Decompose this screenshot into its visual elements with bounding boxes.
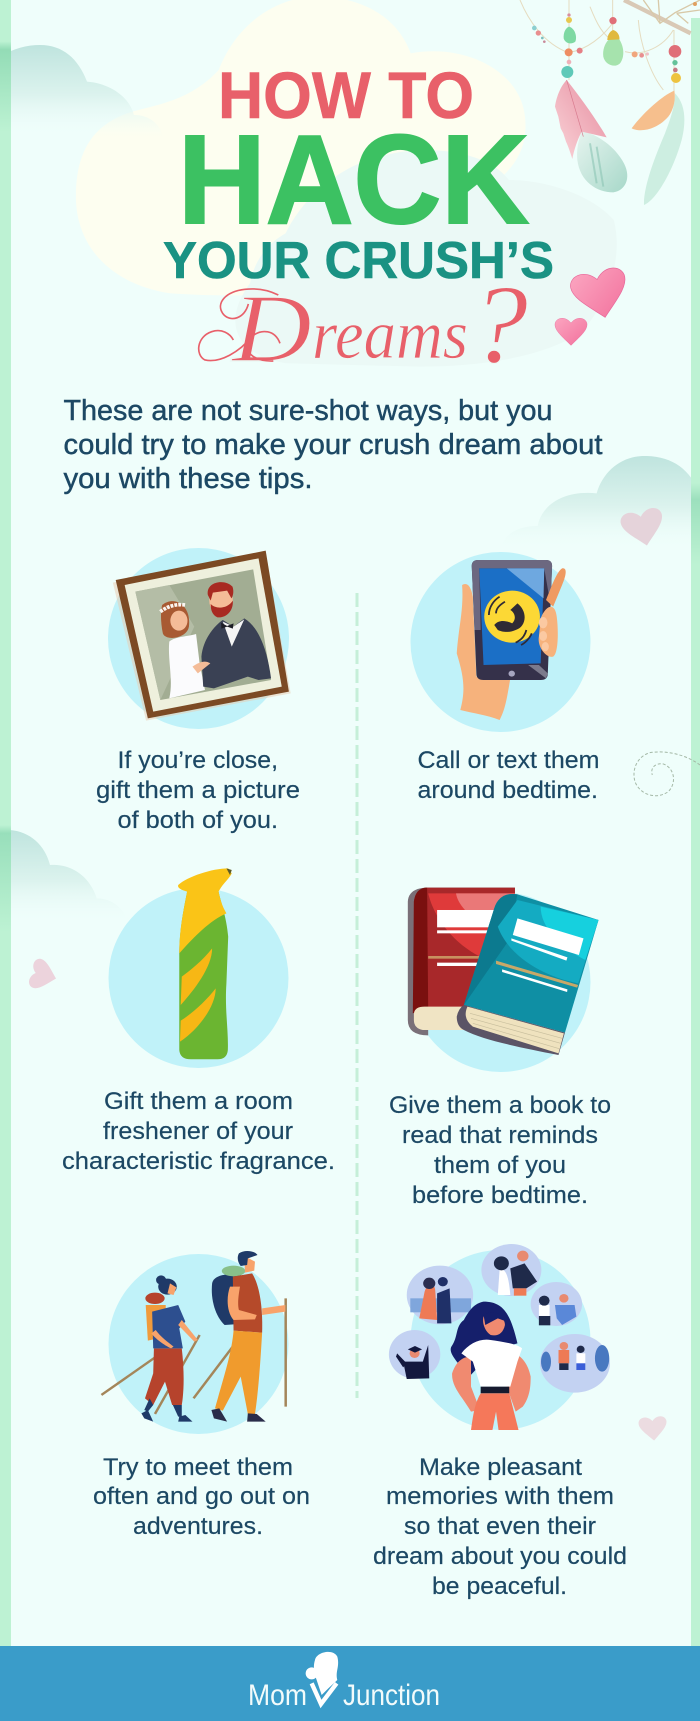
- icon: hand holding phone: [457, 560, 566, 720]
- icon: faint heart right: [619, 506, 667, 550]
- tip text: [373, 1454, 627, 1600]
- dashed spiral decoration: [634, 752, 700, 796]
- tip text: [93, 1454, 310, 1540]
- title line: dreams script: reams: [312, 297, 468, 374]
- tip text: adventures.: [133, 1513, 263, 1540]
- icon: dream catcher feathers: [520, 0, 700, 205]
- tip text: memories with them: [386, 1483, 614, 1510]
- title line: how to: HOW TO: [218, 58, 474, 132]
- right teal cloud: [500, 456, 700, 550]
- panel: room freshener tip: [62, 868, 335, 1175]
- tip text: freshener of your: [103, 1118, 293, 1145]
- memory bubble: hikers in park: [540, 1334, 610, 1393]
- memory bubble: seaside couple: [407, 1266, 473, 1324]
- tip text: Call or text them: [418, 747, 600, 774]
- icon: small pink heart: [555, 318, 587, 345]
- icon: framed couple picture: [113, 551, 291, 721]
- logo: MomJunction: Junction: [343, 1679, 440, 1712]
- title line: your crush's: YOUR CRUSH’S: [163, 232, 554, 290]
- tip text: of both of you.: [118, 807, 278, 834]
- tip text: around bedtime.: [418, 777, 598, 804]
- tip text: Make pleasant: [419, 1454, 582, 1481]
- icon: faint heart left: [28, 957, 60, 993]
- memory bubble: worried pair: [531, 1282, 582, 1326]
- icon circle: [410, 1250, 590, 1430]
- tip text: [418, 747, 600, 804]
- pale teal cloud behind title: [235, 150, 617, 367]
- intro text: could try to make your crush dream about: [64, 429, 602, 461]
- panel: call or text tip: [410, 552, 600, 804]
- memory bubble: graduate: [389, 1330, 440, 1379]
- center dashed divider: [356, 593, 358, 1398]
- right border strip: [691, 18, 700, 1650]
- intro text: These are not sure-shot ways, but you: [64, 395, 552, 427]
- tip text: read that reminds: [402, 1122, 598, 1149]
- tip text: [62, 1088, 335, 1175]
- icon: faint heart lower right: [638, 1416, 668, 1442]
- intro text: you with these tips.: [64, 463, 312, 495]
- panel: memories tip: [373, 1244, 627, 1600]
- tip text: often and go out on: [93, 1483, 310, 1510]
- tip text: [389, 1092, 611, 1209]
- icon: two books: [408, 888, 599, 1055]
- panel: adventures tip: [93, 1251, 310, 1540]
- icon circle: [108, 548, 289, 729]
- tip text: Gift them a room: [104, 1088, 293, 1115]
- tip text: Give them a book to: [389, 1092, 611, 1119]
- tip text: before bedtime.: [412, 1182, 588, 1209]
- title line: dreams script: ?: [470, 263, 528, 387]
- tip text: be peaceful.: [432, 1573, 567, 1600]
- icon circle: [410, 892, 590, 1072]
- tip text: If you’re close,: [118, 747, 278, 774]
- tip text: characteristic fragrance.: [62, 1148, 335, 1175]
- icon: large pink heart: [568, 266, 632, 323]
- icon: two hikers: [101, 1251, 286, 1422]
- tip text: so that even their: [404, 1513, 596, 1540]
- tip text: dream about you could: [373, 1543, 627, 1570]
- tip text: [96, 747, 300, 834]
- left middle teal cloud: [0, 830, 128, 923]
- panel: book tip: [389, 888, 611, 1209]
- title line: dreams script: [199, 263, 528, 387]
- title: [163, 58, 554, 387]
- title line: hack: HACK: [178, 109, 529, 250]
- tip text: them of you: [434, 1152, 566, 1179]
- tip text: gift them a picture: [96, 777, 300, 804]
- icon circle: [108, 888, 288, 1068]
- top-left teal cloud: [0, 45, 163, 137]
- title line: dreams script: D: [230, 275, 312, 383]
- icon circle: [108, 1254, 288, 1434]
- icon: woman with memory bubbles: [389, 1244, 610, 1430]
- cream cloud behind title: [76, 0, 526, 295]
- intro text: [64, 395, 602, 495]
- panel: picture tip: [96, 548, 300, 834]
- tip text: Try to meet them: [103, 1454, 293, 1481]
- footer bar: [0, 1646, 700, 1721]
- icon circle: [410, 552, 590, 732]
- logo: MomJunction: Mom: [248, 1679, 307, 1712]
- icon: room freshener bottle: [178, 868, 232, 1059]
- memory bubble: wedding couple: [481, 1244, 541, 1296]
- left border strip: [0, 0, 11, 1650]
- logo: MomJunction: [248, 1652, 440, 1712]
